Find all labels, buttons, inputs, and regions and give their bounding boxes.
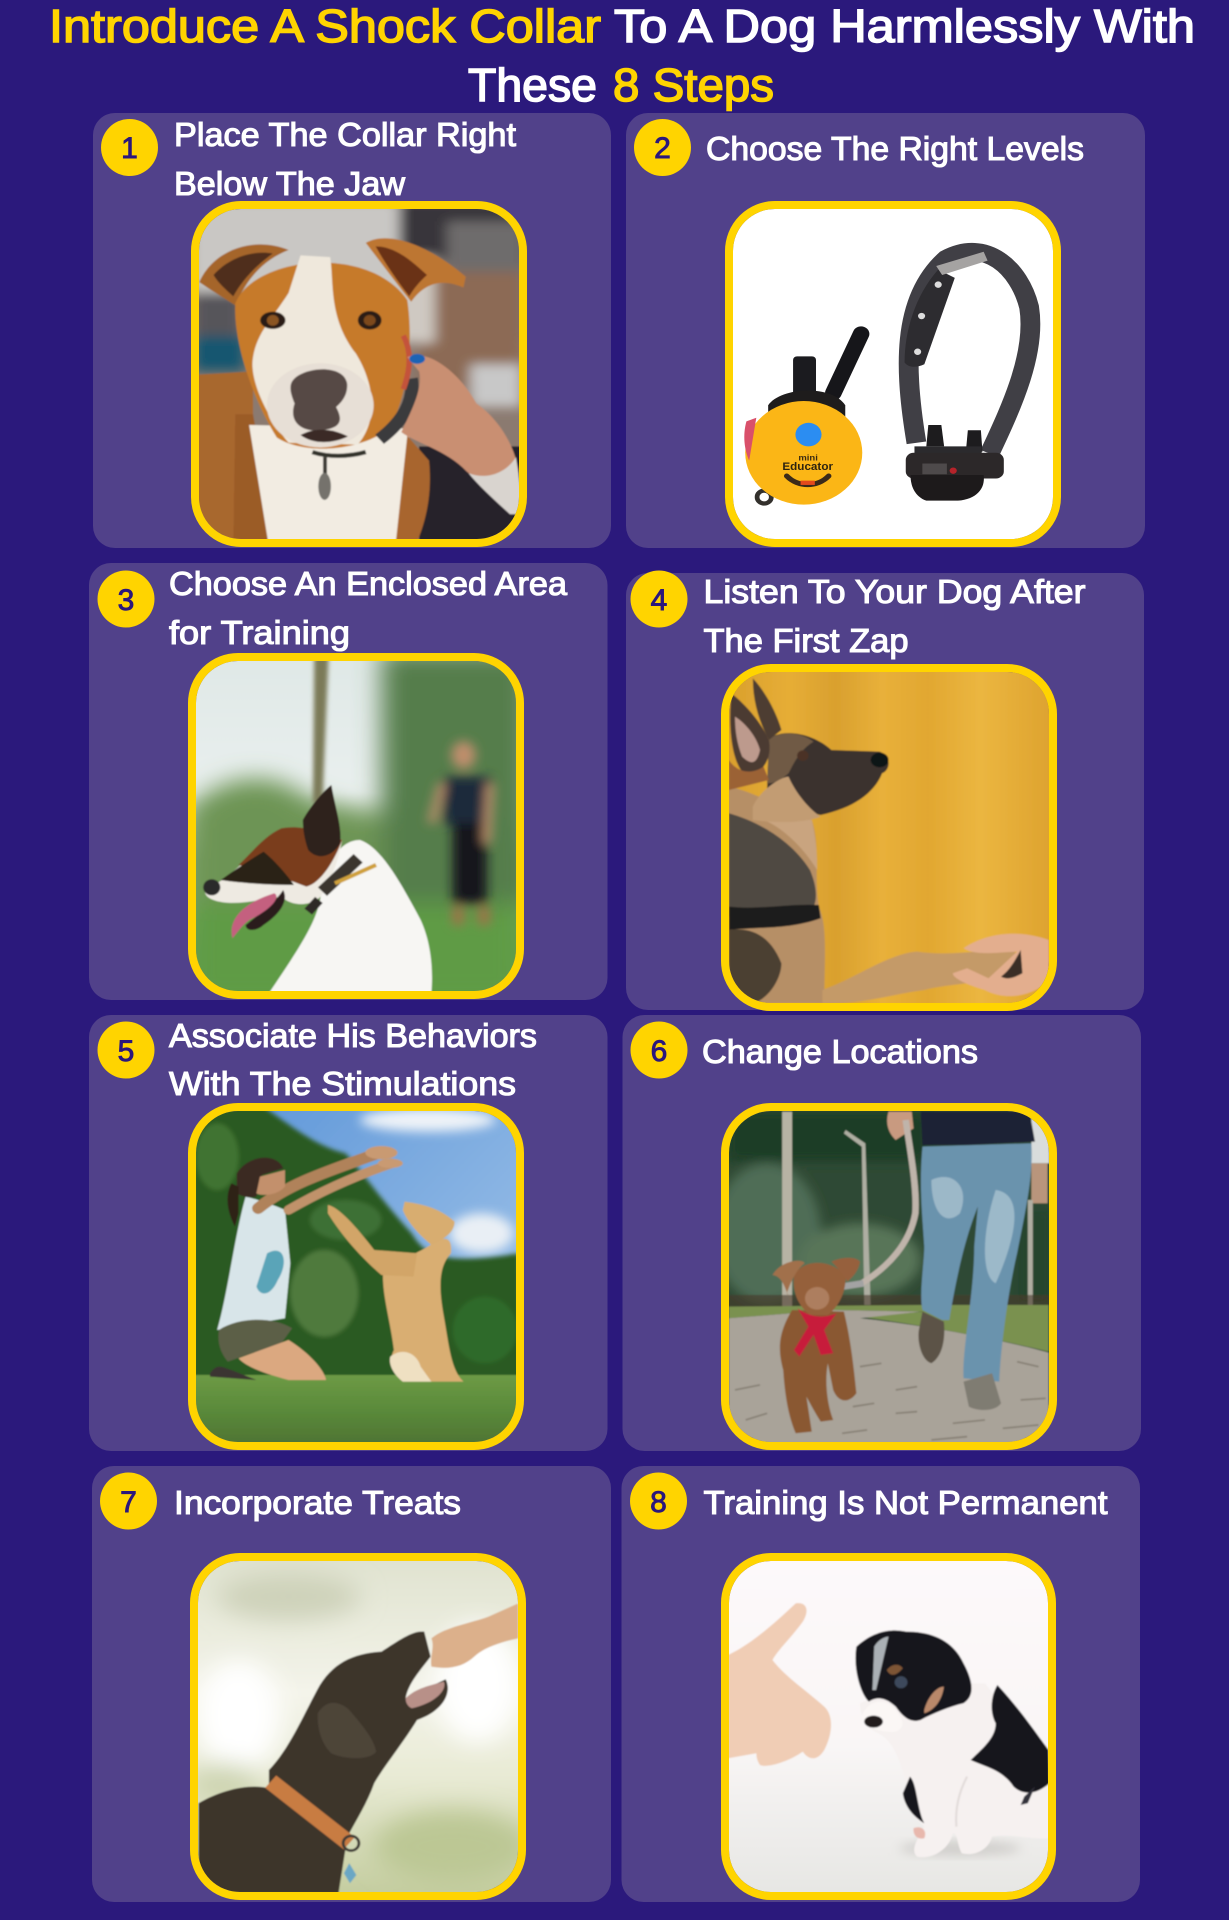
heading: step 4: The First Zap — [704, 622, 908, 659]
shoes — [918, 1312, 944, 1363]
number badge 3: 3 — [118, 584, 134, 617]
photo: remote transmitter and e-collar — [725, 201, 1061, 547]
collar — [271, 1782, 349, 1843]
panel: step 2 — [626, 113, 1145, 548]
puppy white — [860, 1683, 1049, 1857]
photo: girl training a labrador puppy — [192, 1107, 521, 1447]
panel: step 6 — [622, 1015, 1141, 1451]
collar strap — [909, 252, 1030, 454]
heading: step 1 — [174, 116, 516, 202]
hand — [431, 1603, 518, 1668]
heading: step 2: Choose The Right Levels — [706, 130, 1084, 167]
title: These — [468, 59, 597, 111]
panel: step 4 — [626, 570, 1144, 1010]
panel: step 8 — [622, 1466, 1140, 1902]
heading: step 3: for Training — [169, 614, 350, 651]
heading: step 5 — [169, 1017, 537, 1102]
heading: step 4 — [704, 573, 1086, 659]
mouth and tongue — [246, 890, 285, 930]
photo frame 2 — [729, 205, 1057, 543]
right ear — [366, 238, 466, 302]
hand — [728, 1603, 831, 1766]
photo: puppy and pointing finger — [724, 1557, 1053, 1897]
hand and leash — [887, 1112, 914, 1140]
heading: step 7: Incorporate Treats — [174, 1484, 461, 1521]
body — [729, 787, 825, 1003]
heading: step 4: Listen To Your Dog After — [704, 573, 1086, 610]
panel: step 1 — [93, 113, 611, 550]
collar — [322, 858, 358, 892]
muzzle and nose — [267, 363, 374, 447]
photo: remote transmitter and e-collar: Educator — [782, 461, 834, 473]
number badge 4: 4 — [651, 584, 667, 617]
ears — [730, 693, 770, 777]
grass — [192, 1375, 521, 1445]
photo: person walking puppy on leash — [714, 1107, 1053, 1447]
pavement — [729, 1310, 1049, 1443]
person — [921, 1112, 1035, 1145]
title: 8 Steps — [613, 59, 774, 111]
number badge 1: 1 — [121, 132, 138, 165]
heading: step 6: Change Locations — [702, 1033, 978, 1070]
panel: step 5 — [89, 1015, 608, 1451]
heading: step 5: Associate His Behaviors — [169, 1017, 537, 1054]
number badge 5 — [98, 1022, 154, 1078]
heading: step 1: Place The Collar Right — [174, 116, 516, 153]
title: To A Dog Harmlessly With — [614, 0, 1195, 52]
photo frame 4 — [725, 668, 1053, 1007]
number badge 6 — [630, 1022, 688, 1078]
puppy — [780, 1310, 856, 1433]
number badge 6: 6 — [651, 1035, 667, 1068]
heading: step 5: With The Stimulations — [169, 1065, 516, 1102]
heading: step 3: Choose An Enclosed Area — [169, 565, 568, 602]
foliage — [192, 1107, 521, 1380]
panel: step 7 — [92, 1466, 611, 1902]
photo: german shepherd giving paw — [724, 667, 1053, 1007]
title — [49, 0, 1195, 111]
girl — [217, 1197, 290, 1330]
dog head — [204, 840, 343, 906]
photo frame 3 — [192, 657, 520, 995]
number badge 8 — [630, 1472, 687, 1530]
photo: remote transmitter and e-collar: mini — [798, 453, 818, 463]
number badge 5: 5 — [118, 1035, 134, 1068]
number badge 8: 8 — [650, 1486, 667, 1519]
title: Introduce A Shock Collar — [49, 0, 601, 52]
collar and hand — [380, 379, 412, 439]
floor shadow — [899, 1841, 1021, 1856]
number badge 4 — [630, 570, 688, 628]
puppy black head — [855, 1630, 972, 1721]
mouth — [406, 1682, 444, 1708]
head — [235, 263, 410, 449]
photo frame 5 — [192, 1107, 520, 1446]
bandana — [794, 1308, 837, 1357]
number badge 2: 2 — [654, 132, 671, 165]
heading: step 8: Training Is Not Permanent — [704, 1484, 1108, 1521]
puppy black back — [971, 1685, 1049, 1793]
left ear — [199, 244, 289, 305]
paw and hand — [822, 948, 1022, 1003]
photo: dark labrador taking a treat — [189, 1557, 531, 1897]
number badge 7 — [100, 1472, 157, 1530]
dog body — [269, 840, 432, 993]
heading: step 1: Below The Jaw — [174, 165, 405, 202]
puppy — [383, 1239, 464, 1382]
photo: terrier looking back at trainer in park — [196, 661, 516, 991]
number badge 3 — [98, 570, 154, 628]
panel: step 3 — [89, 563, 608, 1003]
number badge 2 — [634, 119, 691, 176]
antenna — [833, 334, 861, 393]
grass — [729, 1305, 1049, 1352]
heading: step 3 — [169, 565, 568, 651]
dog — [199, 1631, 448, 1893]
number badge 1 — [101, 119, 158, 176]
photo: brown and white dog with hand at collar — [199, 209, 519, 539]
photo frame 8 — [725, 1557, 1052, 1896]
photo frame 6 — [725, 1107, 1053, 1446]
number badge 7: 7 — [120, 1486, 137, 1519]
photo frame 1 — [195, 205, 523, 543]
head — [767, 733, 889, 815]
photo frame 7 — [194, 1557, 522, 1896]
